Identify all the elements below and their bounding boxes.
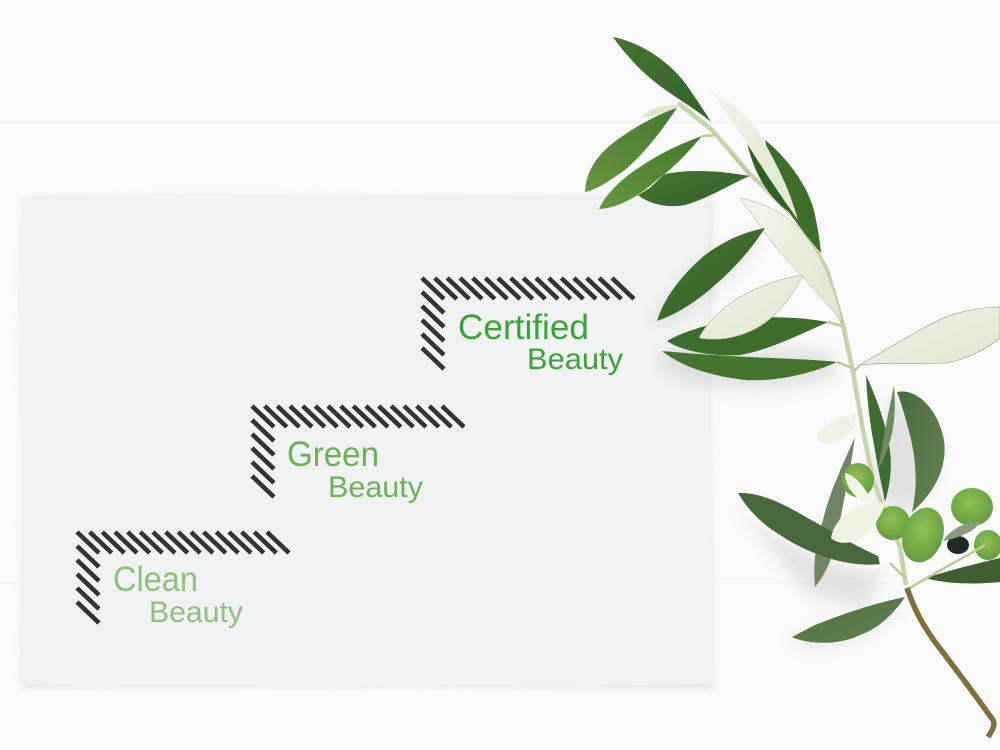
leaf: right dark cut off [925, 558, 1000, 583]
leaf: second left [599, 136, 702, 209]
leaf shadows [654, 234, 936, 646]
olive: large front [895, 502, 951, 568]
leaf: pale centre [699, 275, 803, 339]
step: Certified Beauty [422, 278, 634, 376]
label: Clean: Clean [113, 560, 198, 599]
leaf: top pale [710, 90, 798, 220]
olive: top right [951, 488, 993, 526]
olives [842, 463, 1000, 568]
step: Green Beauty [252, 406, 464, 504]
olive: right edge [974, 530, 1000, 560]
olive: back left [842, 463, 874, 497]
leaf: small pale bud [640, 105, 681, 118]
stripe bracket: Certified [422, 278, 634, 369]
label: Beauty (Clean): Beauty [149, 596, 243, 629]
leaf: thin curved [878, 385, 895, 470]
stem: side twigs [702, 135, 985, 590]
leaf: pale bud over olive [845, 473, 871, 502]
leaf: pale lower centre [831, 503, 885, 543]
leaf: lowest dark [662, 351, 837, 380]
leaf: large grey-green [897, 392, 945, 512]
illustration: olive branch [585, 37, 1000, 737]
leaf: small grey by olives [943, 522, 980, 541]
leaf: horizontal dark [638, 171, 750, 206]
leaf: large pale centre [740, 198, 843, 323]
leaf: dark below pale [667, 317, 828, 355]
leaf: long left [738, 493, 880, 565]
leaf: dark behind right [765, 140, 821, 253]
panel: handmade paper sheet [20, 194, 713, 688]
leaf: narrow dark [866, 375, 891, 502]
leaf: upper left [585, 108, 677, 192]
olive: dark [947, 536, 969, 554]
leaf: bottom [792, 597, 905, 643]
leaf: middle dark diagonal [657, 228, 765, 321]
label: Green: Green [287, 435, 379, 474]
label: Certified: Certified [458, 308, 589, 347]
stem: brown lower [907, 588, 994, 737]
label: Beauty (Certified): Beauty [527, 343, 623, 376]
stem: pale upper [678, 103, 906, 585]
stripe bracket: Green [252, 406, 464, 497]
leaf: top dark [613, 37, 711, 122]
leaf: small pale near stem [817, 414, 857, 443]
leaf: right pale [860, 307, 1000, 365]
stripe bracket: Clean [77, 532, 289, 623]
olive: small centre [876, 506, 910, 540]
label: Beauty (Green): Beauty [328, 471, 423, 504]
step: Clean Beauty [77, 532, 289, 629]
leaf: dark behind left [747, 142, 797, 217]
leaf: greyish lower [814, 437, 855, 587]
